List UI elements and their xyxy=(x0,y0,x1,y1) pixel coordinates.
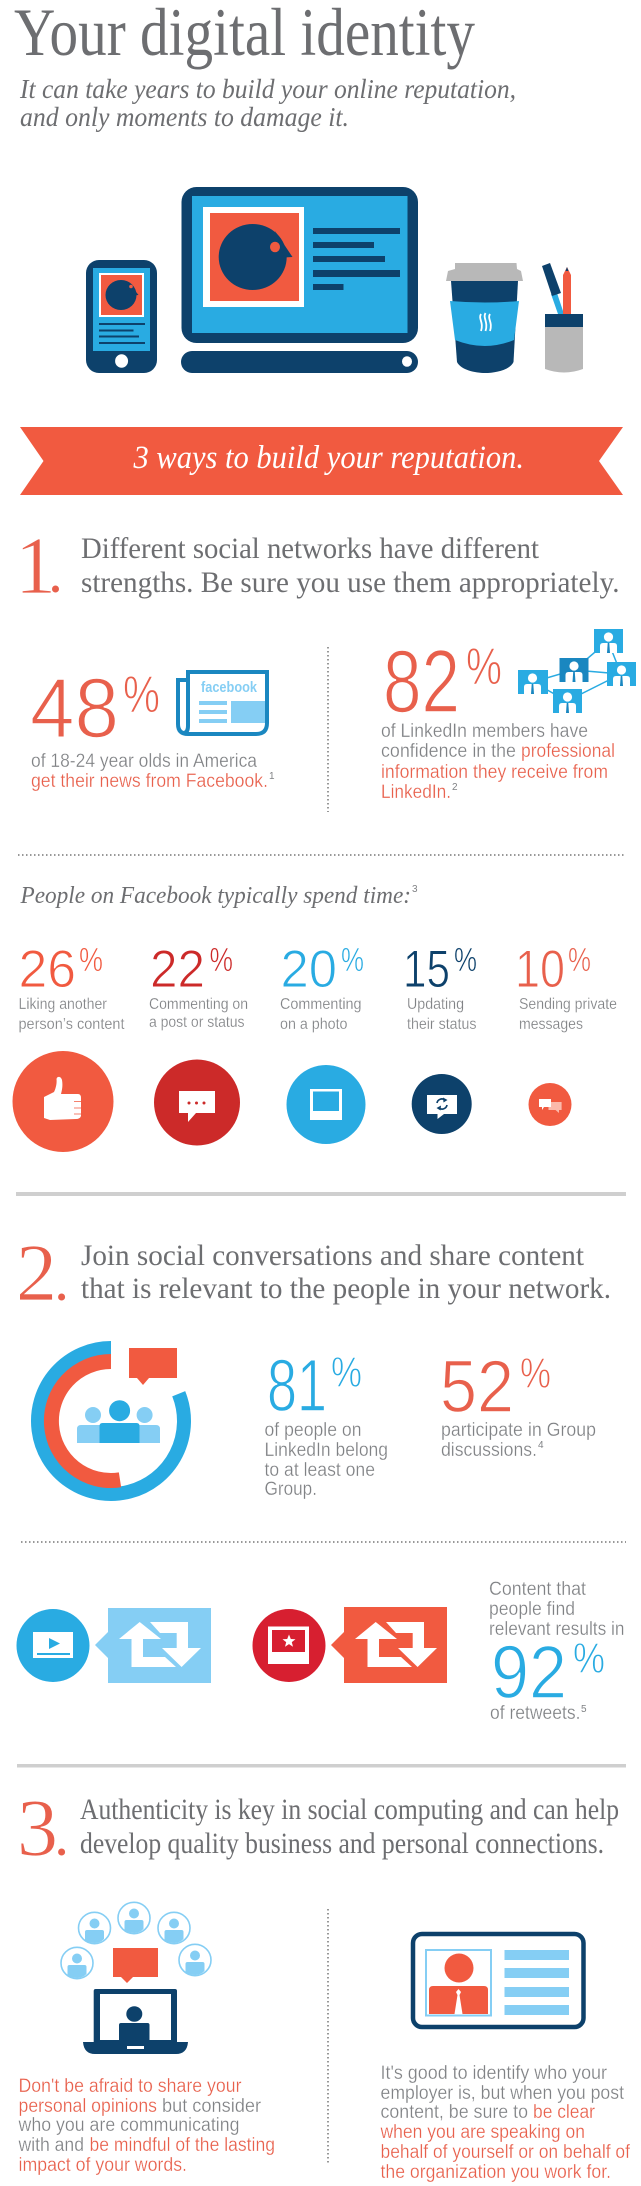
text: identify employer: content, be sure to xyxy=(380,2102,528,2123)
text: share opinions: but consider xyxy=(162,2096,262,2117)
divider xyxy=(17,1764,626,1768)
stat: 92% of retweets: people find xyxy=(489,1599,575,1620)
stat: 82% xyxy=(381,629,636,803)
stat: 81%: 81 xyxy=(267,1344,327,1427)
heading: people on Facebook: People on Facebook typically spend time: xyxy=(20,883,411,909)
icon: coffee cup xyxy=(446,263,523,373)
stat: 15% updating status: Updating xyxy=(407,996,464,1013)
stat: 26% liking: Liking another xyxy=(18,996,108,1013)
stat: 15% updating status: their status xyxy=(407,1016,476,1033)
text: share opinions: impact of your words. xyxy=(18,2155,187,2176)
stat: 10% private messages xyxy=(515,940,617,1033)
subtitle: It can take years to build your online reputation, xyxy=(19,74,516,104)
section 1 heading: strengths. Be sure you use them appropriately. xyxy=(81,566,620,599)
text: identify employer: when you are speaking on xyxy=(380,2122,585,2143)
text: 48% caption: get their news from Facebook. xyxy=(31,771,268,792)
stat: 10% private messages: 10 xyxy=(515,940,565,999)
icon: photo circle xyxy=(286,1065,366,1144)
section 3 heading: 3 xyxy=(17,1782,58,1873)
stat: 52%: 4 xyxy=(538,1440,544,1451)
stat: 82%: % xyxy=(466,638,502,696)
stat: 52%: discussions. xyxy=(441,1440,537,1461)
text: identify employer: employer is, but when you post xyxy=(380,2083,625,2104)
stat: 22% commenting on post: % xyxy=(210,941,233,978)
icon: video retweet xyxy=(16,1608,211,1683)
stat: 10% private messages: messages xyxy=(519,1016,583,1033)
text: 82% caption: of LinkedIn members have xyxy=(381,721,588,742)
icon: employee ID card xyxy=(413,1934,584,2027)
banner: 3 ways to build your reputation. xyxy=(133,440,524,476)
stat: 20% commenting on photo: % xyxy=(341,941,364,978)
text: identify employer xyxy=(380,2063,631,2183)
icon: facebook newspaper xyxy=(178,672,267,734)
icon: private messages circle xyxy=(528,1083,572,1126)
stat: 48%: 48 xyxy=(30,661,119,755)
stat: 22% commenting on post xyxy=(149,940,248,1031)
stat: 10% private messages: % xyxy=(568,941,591,978)
stat: 20% commenting on photo: Commenting xyxy=(280,996,362,1013)
stat: 26% liking xyxy=(18,940,125,1033)
icon: LinkedIn network xyxy=(518,629,636,713)
stat: 26% liking: 26 xyxy=(18,940,76,999)
stat: 15% updating status: % xyxy=(454,941,477,978)
section 3 heading xyxy=(17,1782,619,1873)
stat: 52%: participate in Group xyxy=(441,1420,596,1441)
stat: 81%: Group. xyxy=(264,1479,317,1500)
stat: 10% private messages: Sending private xyxy=(519,996,617,1013)
text: 82% caption: professional xyxy=(521,741,615,762)
icon: facebook newspaper: facebook xyxy=(201,679,258,696)
text: 82% caption: 2 xyxy=(452,782,458,793)
stat: 52%: 52 xyxy=(440,1345,514,1428)
stat: 81%: of people on xyxy=(264,1420,362,1441)
section 1 heading xyxy=(15,520,620,611)
section 1 heading: 1 xyxy=(15,520,56,611)
stat: 22% commenting on post: Commenting on xyxy=(149,996,248,1013)
text: identify employer: the organization you work for. xyxy=(380,2162,611,2183)
icon: pens in holder xyxy=(542,263,583,372)
text: share opinions: with and xyxy=(18,2135,84,2156)
text: share opinions: personal opinions xyxy=(18,2096,157,2117)
icon: thumbs up circle xyxy=(12,1051,114,1152)
text: share opinions: who you are communicating xyxy=(18,2115,240,2136)
stat: 81%: LinkedIn belong xyxy=(264,1440,388,1461)
stat: 15% updating status: 15 xyxy=(403,940,450,999)
stat: 22% commenting on post: 22 xyxy=(150,940,205,999)
stat: 48% xyxy=(30,661,275,792)
icon: comment bubble circle xyxy=(154,1060,240,1146)
icon: smartphone xyxy=(86,260,157,373)
icon: photo retweet xyxy=(252,1607,447,1683)
section 2 heading xyxy=(16,1227,611,1318)
section 2 heading: Join social conversations and share content xyxy=(81,1239,585,1272)
stat: 20% commenting on photo: on a photo xyxy=(280,1016,348,1033)
chart: LinkedIn group donut xyxy=(38,1348,184,1494)
section 2 heading: 2 xyxy=(16,1227,57,1318)
section 2 heading: that is relevant to the people in your network. xyxy=(81,1272,611,1305)
stat: 52% xyxy=(440,1345,596,1461)
subtitle: and only moments to damage it. xyxy=(20,102,349,132)
stat: 22% commenting on post: a post or status xyxy=(149,1014,244,1031)
subtitle xyxy=(19,74,516,132)
stat: 81%: to at least one xyxy=(264,1460,375,1481)
stat: 20% commenting on photo xyxy=(280,940,364,1033)
text: share opinions: Don't be afraid to share your xyxy=(18,2076,242,2097)
text: 48% caption: of 18-24 year olds in America xyxy=(31,751,257,772)
text: 82% caption xyxy=(381,721,615,803)
illustration: devices and desk items xyxy=(86,187,583,373)
icon: laptop with profile xyxy=(181,187,418,373)
stat: 48%: % xyxy=(123,666,160,724)
stat: 26% liking: % xyxy=(79,941,103,978)
stat: 92% of retweets: 5 xyxy=(581,1704,587,1715)
stat: 92% of retweets: relevant results in xyxy=(489,1619,624,1640)
banner xyxy=(20,427,623,495)
stat: 82%: 82 xyxy=(383,631,460,731)
stat: 81% xyxy=(264,1344,388,1500)
text: 82% caption: information they receive from xyxy=(381,762,608,783)
text: 48% caption xyxy=(31,751,275,792)
heading: people on Facebook: 3 xyxy=(412,884,418,895)
stat: 92% of retweets xyxy=(489,1579,624,1724)
stat: 15% updating status xyxy=(403,940,477,1033)
icon: status update circle xyxy=(412,1074,472,1134)
text: identify employer: It's good to identify who your xyxy=(380,2063,608,2084)
text: share opinions xyxy=(18,2076,275,2176)
text: 82% caption: confidence in the xyxy=(381,741,516,762)
divider xyxy=(16,1192,626,1196)
stat: 92% of retweets: 92 xyxy=(491,1630,567,1714)
icon: laptop user with audience xyxy=(61,1902,211,2054)
stat: 92% of retweets: Content that xyxy=(489,1579,587,1600)
section 1 heading: Different social networks have different xyxy=(81,532,540,565)
stat: 26% liking: person’s content xyxy=(18,1016,125,1033)
stat: 92% of retweets: of retweets. xyxy=(490,1703,580,1724)
text: identify employer: be clear xyxy=(533,2102,596,2123)
stat: 52%: % xyxy=(520,1350,551,1398)
text: 82% caption: LinkedIn. xyxy=(381,782,451,803)
text: share opinions: be mindful of the lasting xyxy=(90,2135,275,2156)
stat: 20% commenting on photo: 20 xyxy=(280,940,337,999)
text: 48% caption: 1 xyxy=(269,771,275,782)
stat: 81%: % xyxy=(331,1349,362,1397)
stat: 92% of retweets: % xyxy=(573,1635,605,1683)
